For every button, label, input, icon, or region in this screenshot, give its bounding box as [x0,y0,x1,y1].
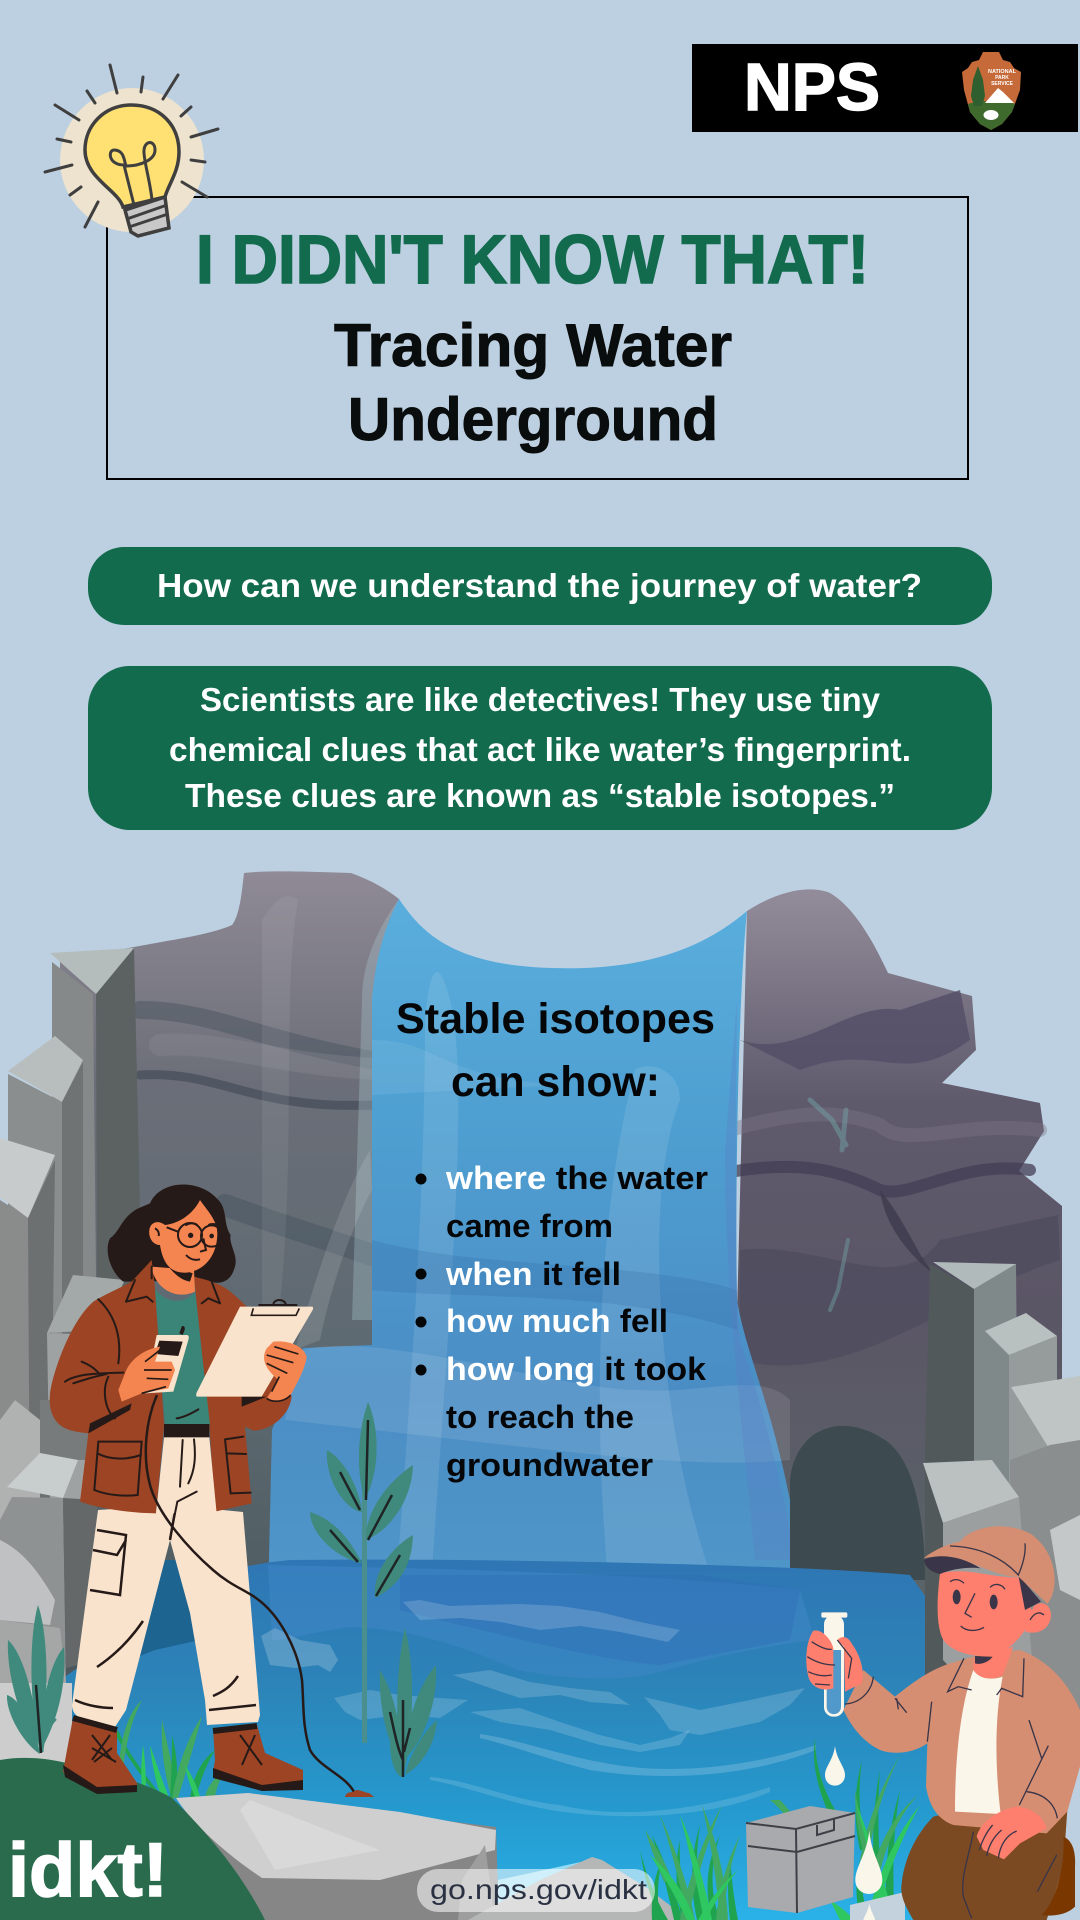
NPS label: NPS [744,50,880,125]
belt [164,1424,209,1437]
plant: small centre [380,1628,437,1777]
darker band in curtain [400,1575,800,1665]
bullet list [416,1160,708,1483]
plant: tall centre [310,1402,413,1743]
pool [60,1560,1000,1920]
idkt logo text: idkt! [8,1828,168,1913]
curtain over pool [268,1565,815,1679]
right grass [640,1738,920,1920]
radio device [145,1326,189,1393]
water curtain [268,899,800,1600]
jacket lines [845,1658,1057,1818]
trouser legs [72,1505,260,1727]
subtitle: line 2: Underground [348,386,718,453]
hand [806,1630,863,1692]
right cliff [730,889,1062,1600]
test tube [821,1612,847,1717]
heading: stable isotopes: Stable isotopes [396,995,715,1043]
heading: stable isotopes [396,995,715,1106]
spray plume left [295,1150,372,1350]
neck shadow [975,1656,993,1664]
ear [1025,1603,1051,1633]
dark rock strata [140,990,1060,1366]
illustration: scientist man [806,1526,1080,1920]
foreground rock [176,1793,499,1920]
dark band through water [372,1240,737,1330]
grass left of box [640,1738,900,1920]
left cliff [60,871,399,1720]
shirt [155,1288,210,1425]
explanation pill [88,666,992,830]
side hair [1018,1575,1041,1610]
trouser top [156,1437,217,1513]
cap peak [924,1556,981,1574]
shirt [955,1670,1003,1814]
probe blob [345,1790,374,1797]
green idkt corner hill [0,1758,265,1920]
url pill: go.nps.gov/idkt [430,1874,647,1905]
right hand [264,1341,307,1401]
water streaks [285,972,790,1600]
shoe [1042,1837,1075,1916]
icon: NPS arrowhead: SERVICE [991,81,1014,87]
left grass [116,1700,225,1800]
collection box [746,1806,855,1913]
heading: stable isotopes: can show: [451,1058,660,1106]
icon: NPS arrowhead: PARK [995,75,1009,81]
plants [7,1402,437,1777]
explanation pill: Scientists are like detectives! They use tiny [200,681,881,718]
head [938,1571,1033,1657]
boots [63,1718,303,1794]
left rock columns [0,948,142,1765]
face features [950,1580,1005,1630]
icon: NPS arrowhead: NATIONAL [988,69,1017,75]
neck [973,1647,1013,1678]
url pill [417,1869,655,1912]
cap [923,1526,1055,1604]
jacket [50,1260,164,1513]
explanation pill: These clues are known as “stable isotopes.” [185,777,895,814]
question pill [88,547,992,625]
pale edge spray [352,899,399,1320]
pockets and jacket lines [65,1267,251,1538]
icon: light bulb [45,65,218,236]
trouser folds [75,1491,256,1710]
light water at bottom [498,1860,600,1920]
jacket [843,1650,1080,1833]
icon: NPS arrowhead [962,52,1021,130]
left hand [118,1347,175,1402]
waterfall scene [0,871,1080,1920]
bullet list: how much fell [446,1303,668,1339]
light rock at bottom right [850,1892,905,1920]
bullet list: where the water [445,1160,708,1196]
glasses and features [155,1223,222,1260]
bullet list: groundwater [446,1447,653,1483]
bullet list: came from [446,1208,613,1244]
drops [825,1746,882,1920]
question pill: How can we understand the journey of water? [157,567,922,604]
explanation pill: chemical clues that act like water’s fingerprint. [169,731,911,768]
subtitle: line 1: Tracing Water [334,312,732,379]
NPS badge [692,44,1078,132]
bullet list: when it fell [445,1256,621,1292]
neck and face [152,1267,195,1295]
title: I didn't know that: I DIDN'T KNOW THAT! [196,221,869,298]
illustration: scientist woman [50,1184,374,1797]
title box [107,197,968,479]
right water edge [725,1000,795,1560]
bullet list: to reach the [446,1399,634,1435]
probe wire [146,1395,354,1792]
hair [108,1184,236,1283]
cave shadow [790,1426,925,1580]
knee hand [977,1807,1047,1859]
upper body [50,1184,313,1538]
right rock columns [923,1262,1080,1760]
trouser lines [963,1832,1057,1918]
trousers [901,1810,1067,1920]
cliff pale veil [262,896,298,1360]
plant: left [7,1605,64,1754]
small centre rock [468,1857,689,1920]
dark water between legs [130,1560,200,1660]
clipboard [196,1300,313,1397]
pool foam [261,1600,816,1816]
bullet list: how long it took [446,1351,706,1387]
